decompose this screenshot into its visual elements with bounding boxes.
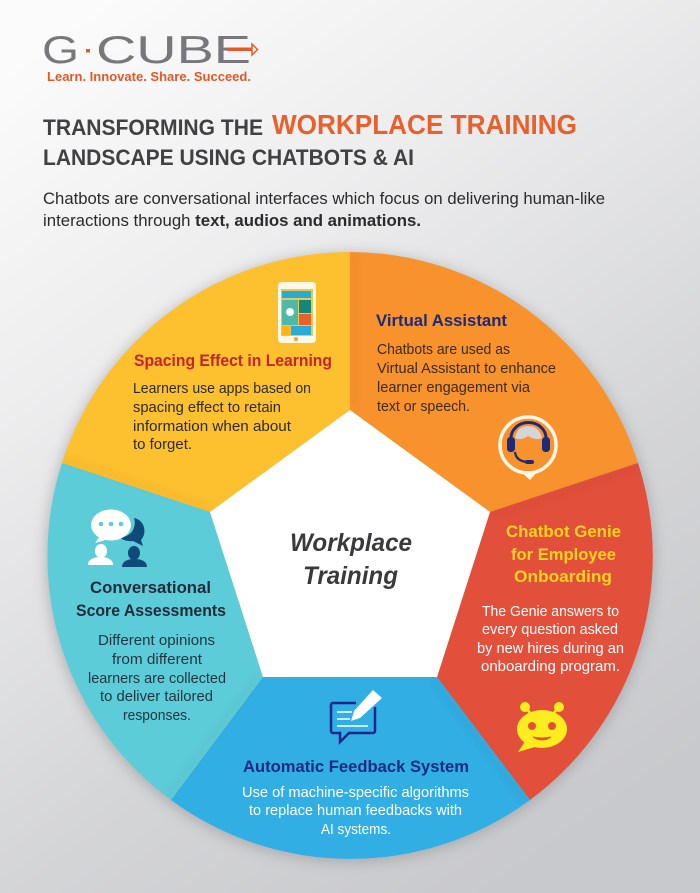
body text: Virtual Assistant to enhance [377,361,556,377]
heading: Automatic Feedback System [243,758,469,776]
body text: AI systems. [321,822,391,838]
panel: virtual assistant [350,252,638,512]
body text: from different [112,652,202,668]
title [43,109,577,170]
panel: chatbot genie [437,463,653,800]
segment [350,252,638,512]
panel: conversational score assessments [47,463,263,800]
logo [42,29,258,84]
body text: responses. [123,708,191,724]
logo dot and arrow [86,44,258,55]
body text: to forget. [133,437,192,453]
heading [506,522,621,586]
intro text: interactions through text, audios and animations. [43,212,421,230]
body text: to replace human feedbacks with [249,803,462,819]
body text [242,785,469,838]
panel: center pentagon [210,410,490,677]
body text: every question asked [482,622,618,638]
heading: Score Assessments [76,602,226,620]
logo wordmark: G [42,29,79,72]
icon: tablet [278,282,316,343]
icon: feedback pencil [331,690,382,742]
icon: conversation [88,510,147,567]
icon: smiling bot [517,702,567,752]
body text [133,381,311,453]
body text: text or speech. [377,399,470,415]
body text: learners are collected [88,671,226,687]
title: WORKPLACE TRAINING [272,109,577,140]
segment edge shading [64,252,640,803]
segment [171,677,530,859]
center label [290,529,412,590]
segment [62,252,350,512]
heading: for Employee [511,545,616,564]
panel: spacing effect [62,252,350,512]
body text: to deliver tailored [100,689,213,705]
center label: Training [303,562,398,590]
heading: Spacing Effect in Learning [134,352,332,370]
intro text: Chatbots are conversational interfaces which focus on delivering human-like [43,190,605,208]
body text: Different opinions [98,633,215,649]
heading: Conversational [90,579,211,597]
logo tagline: Learn. Innovate. Share. Succeed. [47,69,251,84]
segment [47,463,263,800]
logo wordmark: CUBE [96,29,251,72]
intro text [43,190,605,230]
body text [377,342,556,415]
body text: onboarding program. [481,659,620,675]
body text [477,604,624,675]
body text: by new hires during an [477,641,624,657]
body text: The Genie answers to [482,604,619,620]
body text: Learners use apps based on [133,381,311,397]
icon: headset [500,417,556,480]
logo wordmark [42,29,251,72]
segment [437,463,653,800]
body text: Use of machine-specific algorithms [242,785,469,801]
center label: Workplace [290,529,412,557]
circle shadow [46,254,654,862]
title: LANDSCAPE USING CHATBOTS & AI [43,145,414,170]
heading: Chatbot Genie [506,522,621,541]
heading [76,579,226,620]
body text [88,633,226,724]
pentagon [210,410,490,677]
heading: Virtual Assistant [376,312,508,330]
body text: information when about [133,419,291,435]
heading: Onboarding [514,567,612,586]
panel: automatic feedback [171,677,530,859]
title: TRANSFORMING THE [43,115,263,140]
body text: Chatbots are used as [377,342,510,358]
body text: learner engagement via [377,380,531,396]
body text: spacing effect to retain [133,400,281,416]
